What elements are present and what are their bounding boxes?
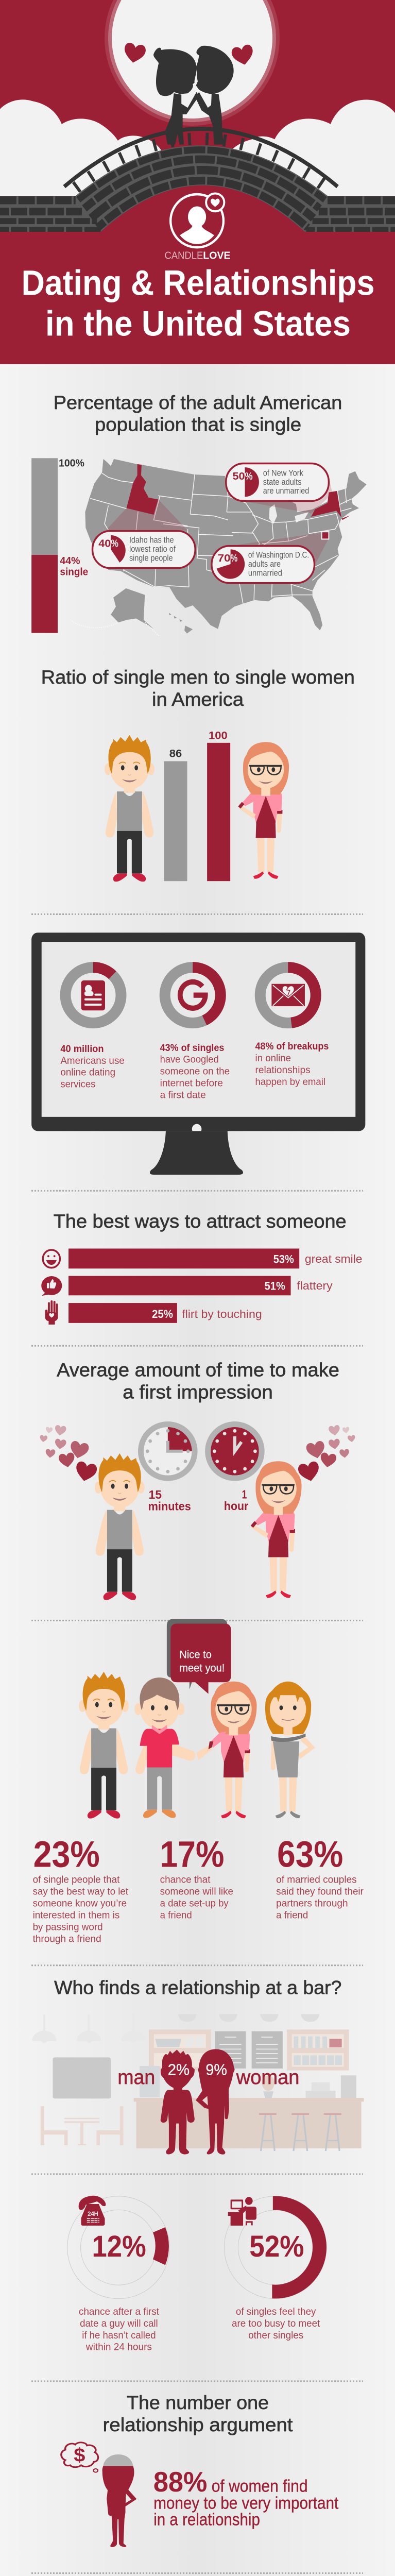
text: 40 million: online dating [60,1067,115,1078]
stat: 23%: say the best way to let [33,1886,129,1897]
bar: flattery [68,1276,333,1295]
callout: Washington D.C. 70%: 70 [218,552,231,564]
section: best ways bars [41,1248,362,1325]
stat: 17%: someone will like [160,1886,233,1897]
stat: 88% of women: of women find [212,2477,308,2496]
moon [105,0,280,126]
icon: smile [43,1250,60,1268]
callout: Washington D.C. 70%: adults are [248,560,281,569]
section: percentage single heading [54,392,342,435]
heading: Average amount of time to make [57,1359,339,1381]
highlighted states with beams [106,464,350,567]
stat: 23%: through a friend [33,1934,101,1944]
stat: 17%: chance that [160,1874,211,1886]
icon: thought cloud with dollar [61,2443,98,2472]
header illustration: clouds, bridge and couple [0,42,395,344]
heading: who finds a relationship at a bar: Who finds a relationship at a bar? [54,1977,341,1998]
callout: Idaho 40%: % [111,538,118,550]
stat: 63%: of married couples [276,1874,357,1886]
text: 40 million: services [60,1079,95,1090]
woman with glasses [197,1682,256,1818]
section: friends [33,1619,364,1944]
hearts right [297,1425,356,1483]
section: first impression [39,1359,356,1600]
icon: telephone: 24H [88,2210,98,2217]
ring chart: 52% [224,2196,327,2299]
callout: New York 50%: of New York [263,469,304,478]
text: chance after a first date: chance after a first [79,2307,160,2317]
bar 100: 100 [209,730,228,742]
icon: thought cloud with dollar: $ [74,2445,85,2466]
stat: 23%: by passing word [33,1922,103,1933]
text: 48% of breakups: in online [255,1053,291,1064]
stat: 88% of women [153,2466,338,2529]
stat: 17%: a date set-up by [160,1898,229,1909]
stacked bar 44% single: 100% [59,457,84,469]
callout: Washington D.C. 70%: % [231,552,237,564]
stat: 23%: someone know you’re [33,1898,127,1909]
woman figure [238,742,289,879]
couple silhouette [153,46,234,145]
stacked bar 44% single [31,457,88,633]
label: 1 hour: hour [224,1499,248,1513]
heading: number one relationship argument [103,2392,293,2435]
text: too busy: are too busy to meet [232,2318,320,2329]
stat: 63%: said they found their [276,1886,364,1897]
stacked bar 44% single: single [60,566,88,578]
stat: 63% [276,1834,364,1921]
bar: flirt by touching: 25% [152,1308,173,1320]
stat: 17%: 17% [160,1834,224,1875]
clock: 1 hour [208,1424,262,1478]
text: 43% of singles: 43% of singles [160,1042,224,1054]
bar: flirt by touching [68,1303,262,1323]
heading: in America [152,688,244,710]
woman figure [251,1461,302,1598]
stat: 88% of women: 88% [153,2466,207,2498]
callout: New York 50%: are unmarried [263,487,309,496]
hearts [123,42,255,67]
icon: Google G [180,982,205,1008]
callout: New York 50%: state adults [263,478,302,487]
Alaska and Hawaii [111,588,193,634]
heading [57,1359,339,1402]
text: 40 million: 40 million [60,1044,104,1055]
text: chance after a first date: within 24 hours [85,2342,152,2353]
title: Dating & Relationships [22,263,374,303]
text: 48% of breakups [255,1041,329,1088]
callout: Idaho 40% [93,531,195,568]
text: 43% of singles: a first date [160,1090,206,1101]
bar 86 [164,748,187,881]
man silhouette 2% [161,2049,195,2155]
callout: New York 50%: 50 [233,471,245,482]
speech bubble: Nice to [179,1649,212,1660]
text: chance after a first date [79,2307,160,2353]
section: bar scene [32,2014,364,2155]
text: chance after a first date: if he hasn’t called [82,2330,156,2341]
man with polo [134,1677,195,1818]
icon: hand with heart [45,1300,58,1325]
heading: a first impression [123,1381,273,1402]
text: 43% of singles: internet before [160,1078,223,1089]
text: 48% of breakups: 48% of breakups [255,1041,329,1052]
speech bubble: meet you! [179,1662,225,1674]
stat: 23%: interested in them is [33,1910,119,1921]
stat: 17% [160,1834,233,1921]
bar background illustration [32,2014,364,2151]
text: 40 million: Americans use [60,1055,125,1066]
logo [164,194,231,262]
text: 48% of breakups: relationships [255,1065,311,1076]
bar: great smile: 53% [273,1253,294,1266]
logo: CANDLE [164,250,203,262]
stat: 63%: a friend [276,1910,308,1921]
text: too busy: other singles [248,2330,303,2341]
callout: Idaho 40%: single people [129,554,173,563]
hearts left [39,1425,98,1483]
ring chart: 12%: 12% [92,2230,146,2263]
section: percentage single heading: population that is single [95,414,301,435]
stat: 63%: 63% [277,1834,343,1875]
woman silhouette 9% [196,2049,235,2155]
callout: New York 50%: % [245,471,253,482]
bridge [0,129,395,232]
bar: flattery: 51% [265,1280,285,1293]
man figure [105,735,154,882]
man silhouette 2%: 2% [168,2060,190,2078]
label: 15 minutes [148,1488,191,1513]
heading: number one relationship argument: The number one [127,2392,269,2413]
section: money argument [61,2443,338,2547]
woman in gray dress [265,1682,315,1818]
label: 1 hour: 1 [242,1487,247,1501]
ring chart: 12% [67,2196,169,2299]
section: online dating monitor [31,933,365,1175]
US map [72,459,367,636]
text: chance after a first date: date a guy will call [80,2318,158,2329]
icon: person at desk [228,2197,256,2226]
speech bubble [167,1619,231,1694]
bar: great smile: great smile [305,1252,362,1265]
text: 43% of singles [160,1042,230,1101]
donut chart: 43% [165,968,220,1023]
icon: thumbs up bubble [41,1276,62,1296]
text: too busy [232,2307,320,2341]
label: man: man [117,2065,155,2088]
callout: Washington D.C. 70% [212,546,315,583]
stat: 23%: of single people that [33,1874,120,1886]
icon: profile document [81,980,105,1010]
text: too busy: of singles feel they [236,2307,316,2317]
stat: 17%: a friend [160,1910,192,1921]
callout: New York 50% [226,463,329,501]
stat: 23%: 23% [33,1834,100,1875]
heading: number one relationship argument: relationship argument [103,2414,293,2435]
section: percentage single heading: Percentage of the adult American [54,392,342,413]
title [22,263,374,344]
section: ring stats [67,2196,327,2353]
header banner [0,0,395,364]
heading: Ratio of single men to single women [41,666,355,688]
label: 15 minutes: 15 [149,1488,162,1501]
label: 1 hour [224,1487,248,1513]
callout: Washington D.C. 70%: unmarried [248,569,282,578]
text: 43% of singles: someone on the [160,1066,230,1077]
callout: Idaho 40%: 40 [98,538,111,550]
section: ratio of men to women [41,666,355,882]
monitor [31,933,365,1175]
callout: Idaho 40%: Idaho has the [129,536,174,545]
label: 15 minutes: minutes [148,1499,191,1513]
bar 86: 86 [169,748,182,759]
donut chart: 40 million [65,968,121,1023]
donut chart: 48% [260,968,316,1023]
stat: 23% [33,1834,129,1944]
bar 100 [207,730,230,881]
clouds [0,99,395,196]
callout: Washington D.C. 70%: of Washington D.C. [248,551,309,560]
label: woman: woman [236,2065,299,2088]
stat: 63%: partners through [276,1898,348,1909]
ring chart: 52%: 52% [249,2230,304,2263]
stat: 88% of women: money to be very important [153,2494,338,2513]
callout: Idaho 40%: lowest ratio of [129,545,176,554]
title: in the United States [45,304,351,344]
icon: telephone [79,2196,106,2226]
man with tank top [79,1672,129,1819]
icon: broken heart envelope [271,984,305,1006]
stat: 88% of women: in a relationship [153,2510,260,2529]
logo: LOVE [203,250,231,262]
woman silhouette 9%: 9% [205,2060,227,2078]
section: single population and map [31,457,367,636]
heading [41,666,355,710]
stacked bar 44% single: 44% [60,555,80,567]
text: 48% of breakups: happen by email [255,1077,325,1088]
bar: great smile [68,1248,362,1268]
heading: best ways to attract: The best ways to attract someone [54,1210,347,1232]
clock: 15 minutes [141,1424,195,1478]
man figure [95,1453,145,1600]
text: 40 million [60,1044,125,1090]
woman silhouette filled 88% [102,2454,136,2547]
text: 43% of singles: have Googled [160,1054,219,1065]
bar: flattery: flattery [297,1279,333,1292]
bar: flirt by touching: flirt by touching [182,1308,262,1320]
